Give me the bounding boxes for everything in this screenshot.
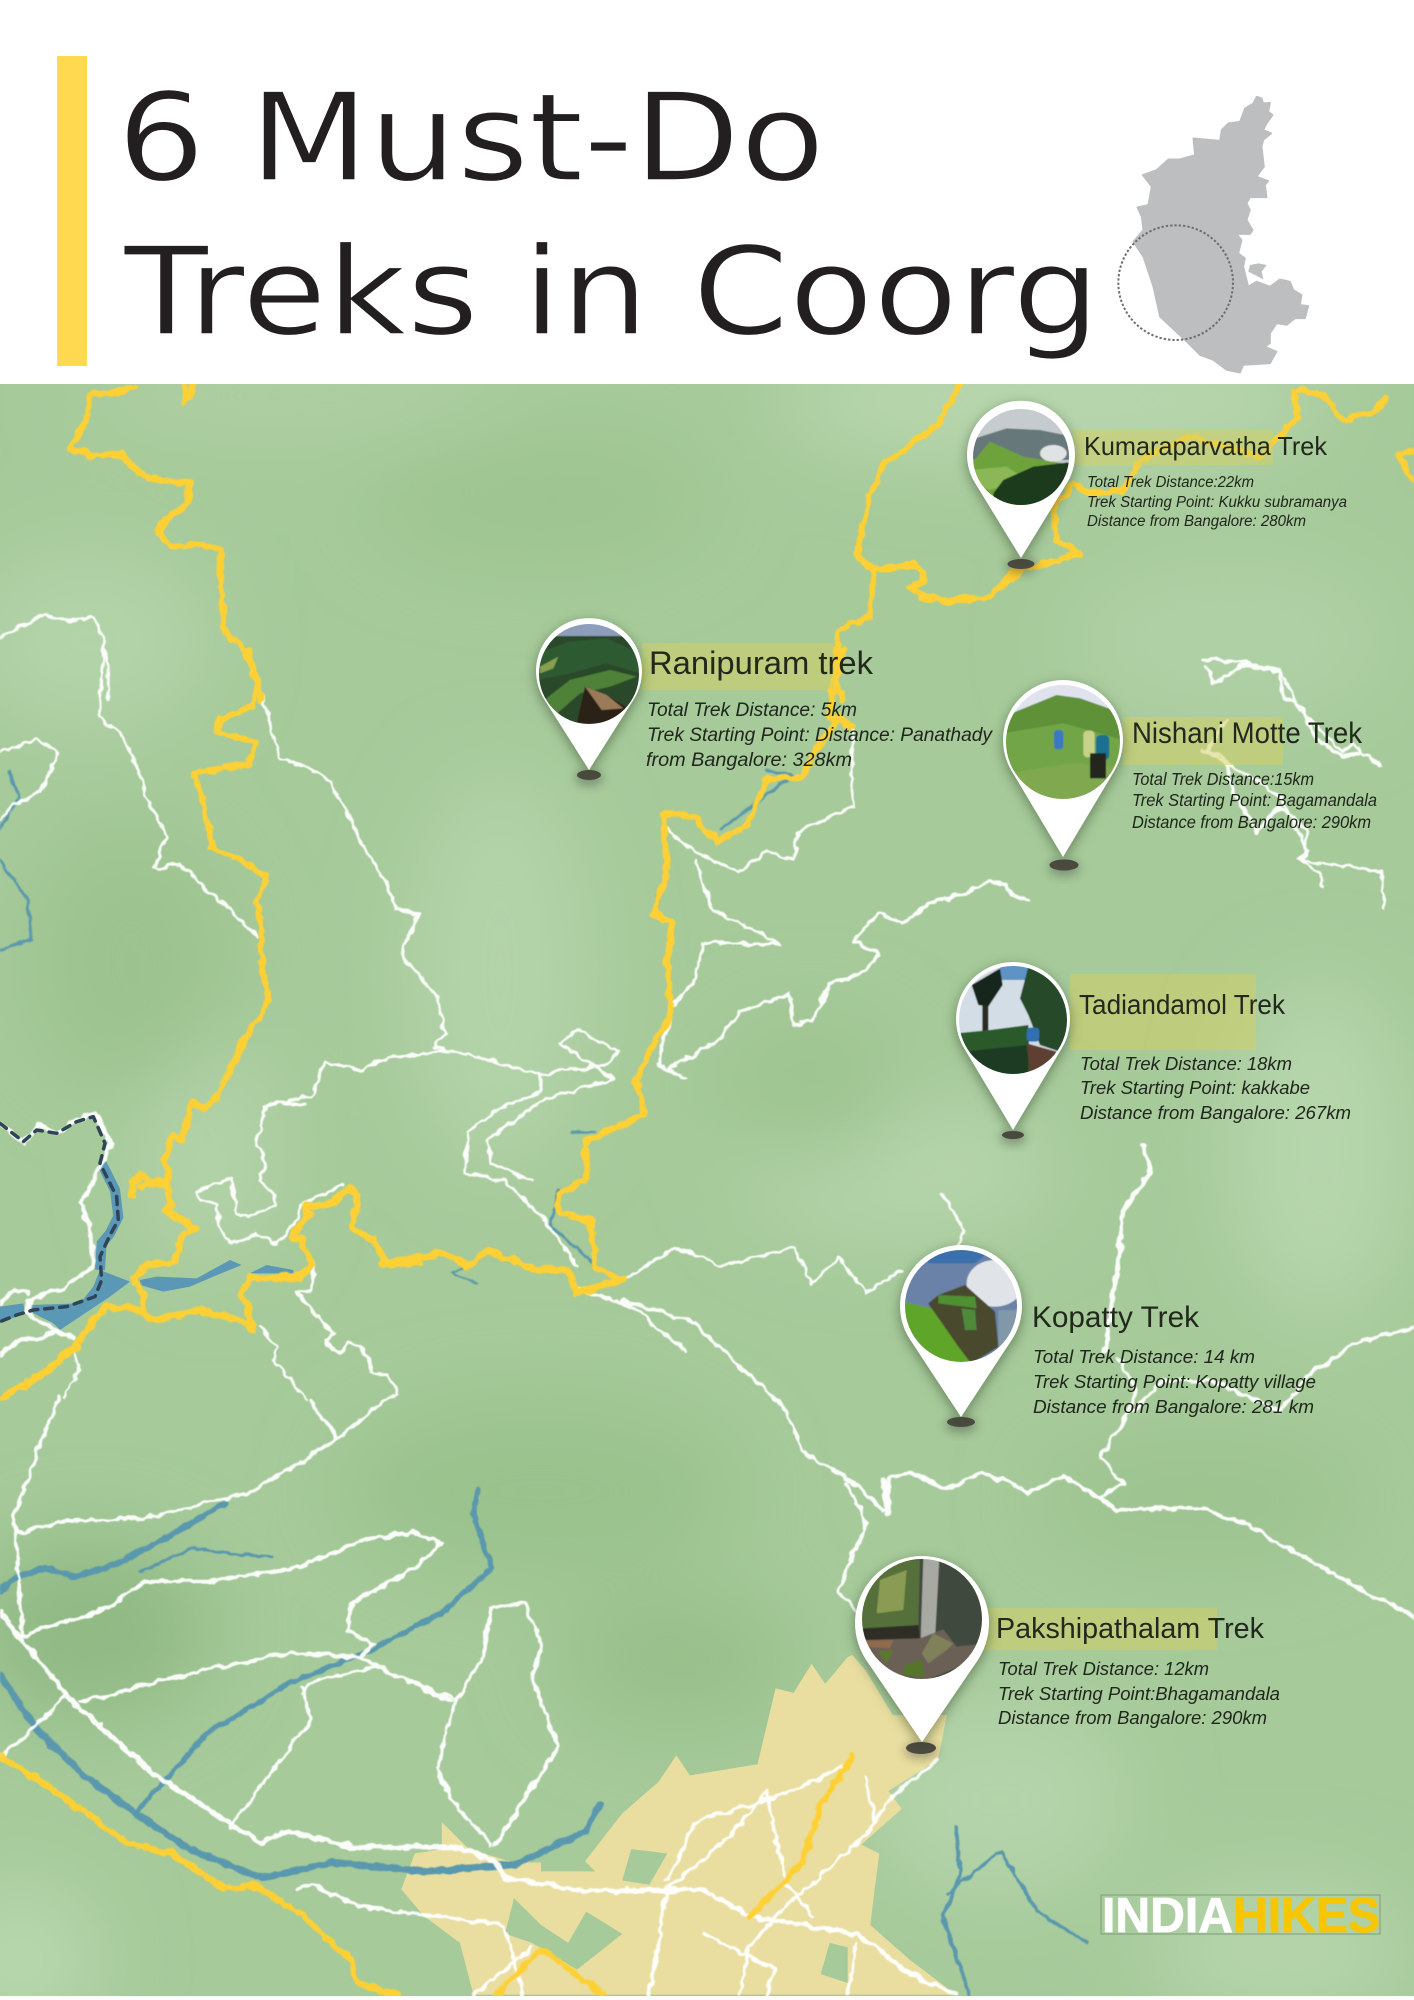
panel: Pakshipathalam Trek (855, 1556, 1280, 1759)
details: Nishani Motte: Total Trek Distance:15km (1132, 769, 1314, 789)
dashed state boundary (0, 1117, 118, 1322)
details: Tadiandamol: Total Trek Distance: 18km (1080, 1053, 1292, 1074)
icon: Karnataka state map with dotted circle (1118, 97, 1308, 373)
river delta (0, 1163, 293, 1330)
map pin: Ranipuram (536, 618, 643, 786)
title highlight: Nishani Motte (1123, 717, 1283, 765)
details: Tadiandamol (1080, 1053, 1351, 1123)
city area (401, 1655, 956, 1995)
panel: Tadiandamol Trek (956, 962, 1351, 1145)
details: Kumaraparvatha (1087, 474, 1347, 530)
map pin: Nishani Motte (1003, 680, 1123, 876)
title highlight: Kumaraparvatha (1073, 430, 1273, 465)
panel: Ranipuram trek (536, 618, 993, 786)
details: Pakshipathalam (998, 1658, 1280, 1728)
heading: Kopatty Trek: Kopatty Trek (1032, 1301, 1200, 1334)
details: Pakshipathalam: Total Trek Distance: 12km (998, 1658, 1209, 1679)
details: Kopatty: Total Trek Distance: 14 km (1033, 1346, 1255, 1367)
details: Tadiandamol: Trek Starting Point: kakkabe (1080, 1077, 1310, 1098)
logo: Indiahikes (1101, 1889, 1380, 1943)
details: Nishani Motte: Trek Starting Point: Bagamandala (1132, 790, 1377, 810)
details: Kopatty: Trek Starting Point: Kopatty village (1033, 1371, 1316, 1392)
title: 6 Must-Do (117, 67, 825, 209)
details: Ranipuram: Trek Starting Point: Distance: Panathady (647, 724, 993, 746)
white roads (0, 616, 1414, 1995)
rivers (0, 771, 1087, 1995)
heading: Tadiandamol Trek: Tadiandamol Trek (1079, 989, 1286, 1020)
heading: Pakshipathalam Trek: Pakshipathalam Trek (996, 1613, 1264, 1645)
title accent bar (57, 56, 87, 366)
details: Ranipuram: Total Trek Distance: 5km (647, 699, 857, 721)
title (117, 67, 1100, 363)
title highlight: Pakshipathalam (983, 1608, 1217, 1650)
details: Kopatty: Distance from Bangalore: 281 km (1033, 1396, 1314, 1417)
heading: Kumaraparvatha Trek: Kumaraparvatha Trek (1084, 431, 1328, 461)
panel: Nishani Motte Trek (1003, 680, 1377, 876)
details: Kumaraparvatha: Trek Starting Point: Kukku subramanya (1087, 494, 1347, 511)
details: Pakshipathalam: Distance from Bangalore: 290km (998, 1707, 1267, 1728)
details: Kumaraparvatha: Distance from Bangalore: 280km (1087, 513, 1306, 530)
details: Pakshipathalam: Trek Starting Point:Bhagamandala (998, 1683, 1280, 1704)
details: Ranipuram (646, 699, 993, 771)
details: Nishani Motte (1132, 769, 1377, 832)
map pin: Tadiandamol (956, 962, 1070, 1145)
details: Kopatty (1033, 1346, 1316, 1417)
title highlight: Tadiandamol (1070, 974, 1256, 1050)
details: Nishani Motte: Distance from Bangalore: 290km (1132, 812, 1371, 832)
panel: Kopatty Trek (900, 1245, 1316, 1433)
map pin: Kopatty (900, 1245, 1023, 1433)
title: Treks in Coorg (123, 221, 1100, 363)
logo: Indiahikes: INDIA (1102, 1889, 1233, 1943)
map pin: Pakshipathalam (855, 1556, 989, 1759)
title highlight: Ranipuram (642, 643, 834, 690)
map pin: Kumaraparvatha (967, 401, 1075, 574)
heading: Ranipuram trek: Ranipuram trek (649, 645, 874, 681)
details: Tadiandamol: Distance from Bangalore: 267km (1080, 1102, 1351, 1123)
heading: Nishani Motte Trek: Nishani Motte Trek (1132, 717, 1363, 750)
details: Ranipuram: from Bangalore: 328km (646, 749, 852, 771)
logo: Indiahikes: HIKES (1233, 1889, 1380, 1943)
panel: Kumaraparvatha Trek (967, 401, 1347, 574)
details: Kumaraparvatha: Total Trek Distance:22km (1087, 474, 1254, 491)
